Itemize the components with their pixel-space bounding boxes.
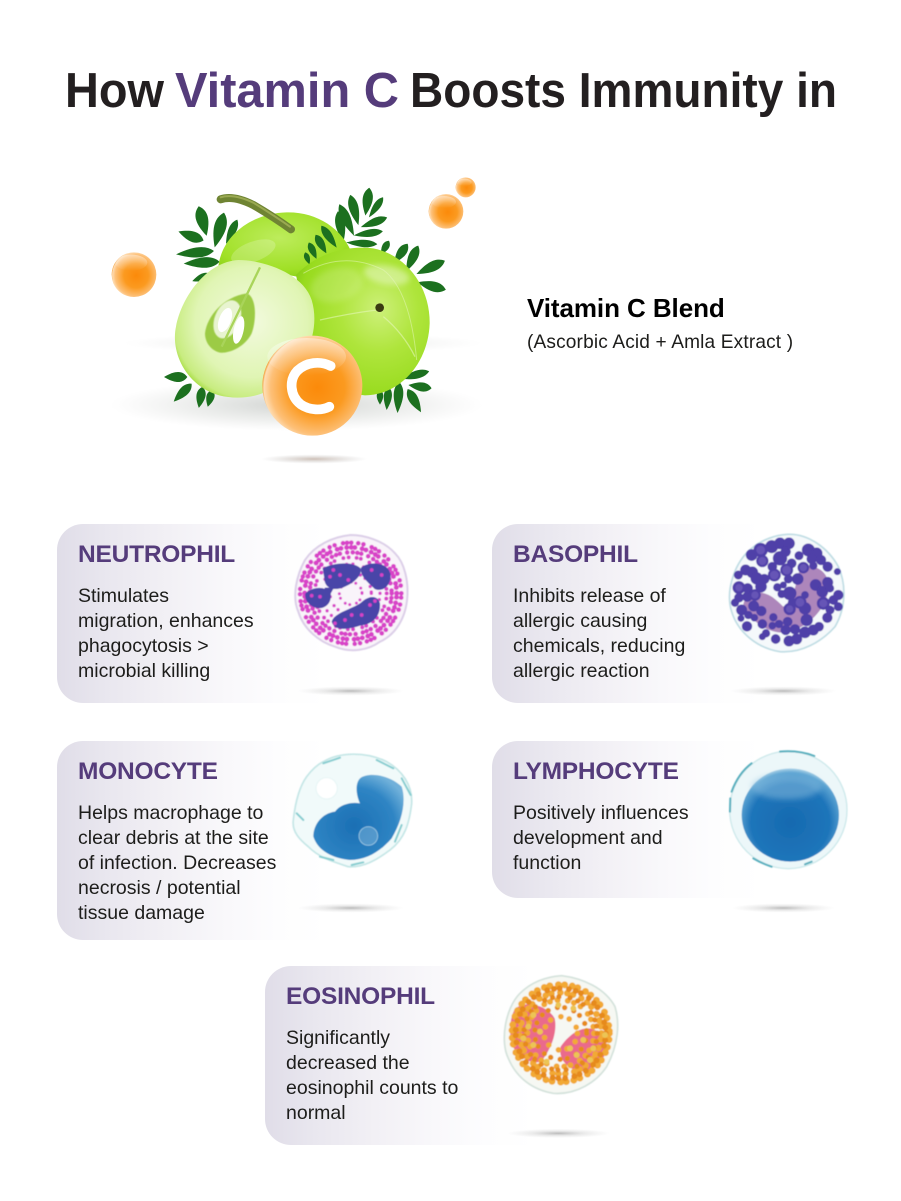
panel: lymphocyte [492, 741, 852, 898]
description: tissue damage [78, 902, 205, 924]
heading: EOSINOPHIL [286, 983, 435, 1010]
vitamin C orb with letter [262, 336, 362, 436]
cut fruit half [175, 260, 314, 398]
description [513, 585, 685, 682]
description: clear debris at the site [78, 827, 269, 849]
description: necrosis / potential [78, 877, 241, 899]
description: allergic causing [513, 610, 647, 632]
ground shadows [110, 333, 483, 464]
small orb left [112, 252, 156, 297]
description: microbial killing [78, 660, 210, 682]
back fruit [218, 212, 353, 277]
heading: MONOCYTE [78, 758, 218, 785]
icon: neutrophil cell [294, 534, 409, 694]
description: development and [513, 827, 663, 849]
icon: lymphocyte cell [728, 750, 848, 912]
description: phagocytosis > [78, 635, 209, 657]
panel: monocyte [57, 741, 417, 940]
icon: basophil cell [728, 533, 846, 694]
small orb upper right [429, 194, 463, 229]
description: function [513, 852, 581, 874]
heading: NEUTROPHIL [78, 541, 235, 568]
description: decreased the [286, 1052, 410, 1074]
description: Inhibits release of [513, 585, 666, 607]
description: chemicals, reducing [513, 635, 685, 657]
description: Positively influences [513, 802, 689, 824]
description [286, 1027, 458, 1124]
description: normal [286, 1102, 346, 1124]
stem [221, 196, 291, 229]
description [78, 585, 254, 682]
title: Boosts Immunity in [410, 64, 837, 118]
description: allergic reaction [513, 660, 650, 682]
ingredient detail: (Ascorbic Acid + Amla Extract ) [527, 332, 793, 353]
title: Vitamin C [175, 64, 399, 118]
description: Stimulates [78, 585, 169, 607]
whole fruit [296, 248, 430, 395]
description: of infection. Decreases [78, 852, 276, 874]
panel: basophil [492, 524, 852, 703]
tiny orb upper right [456, 177, 476, 197]
heading: BASOPHIL [513, 541, 638, 568]
description: eosinophil counts to [286, 1077, 458, 1099]
icon: eosinophil cell [503, 974, 619, 1137]
description: Helps macrophage to [78, 802, 263, 824]
title: How [65, 64, 165, 118]
title [65, 64, 837, 118]
ingredient label [527, 293, 793, 353]
description: migration, enhances [78, 610, 254, 632]
heading: LYMPHOCYTE [513, 758, 679, 785]
panel: eosinophil [265, 966, 625, 1145]
description: Significantly [286, 1027, 390, 1049]
illustration: amla fruits with vitamin C orbs [112, 177, 476, 463]
panel: neutrophil [57, 524, 417, 703]
description [513, 802, 689, 874]
icon: monocyte cell [292, 753, 413, 912]
leaves [164, 187, 447, 415]
leaves over back fruit [303, 223, 340, 265]
ingredient name: Vitamin C Blend [527, 293, 725, 323]
description [78, 802, 276, 924]
